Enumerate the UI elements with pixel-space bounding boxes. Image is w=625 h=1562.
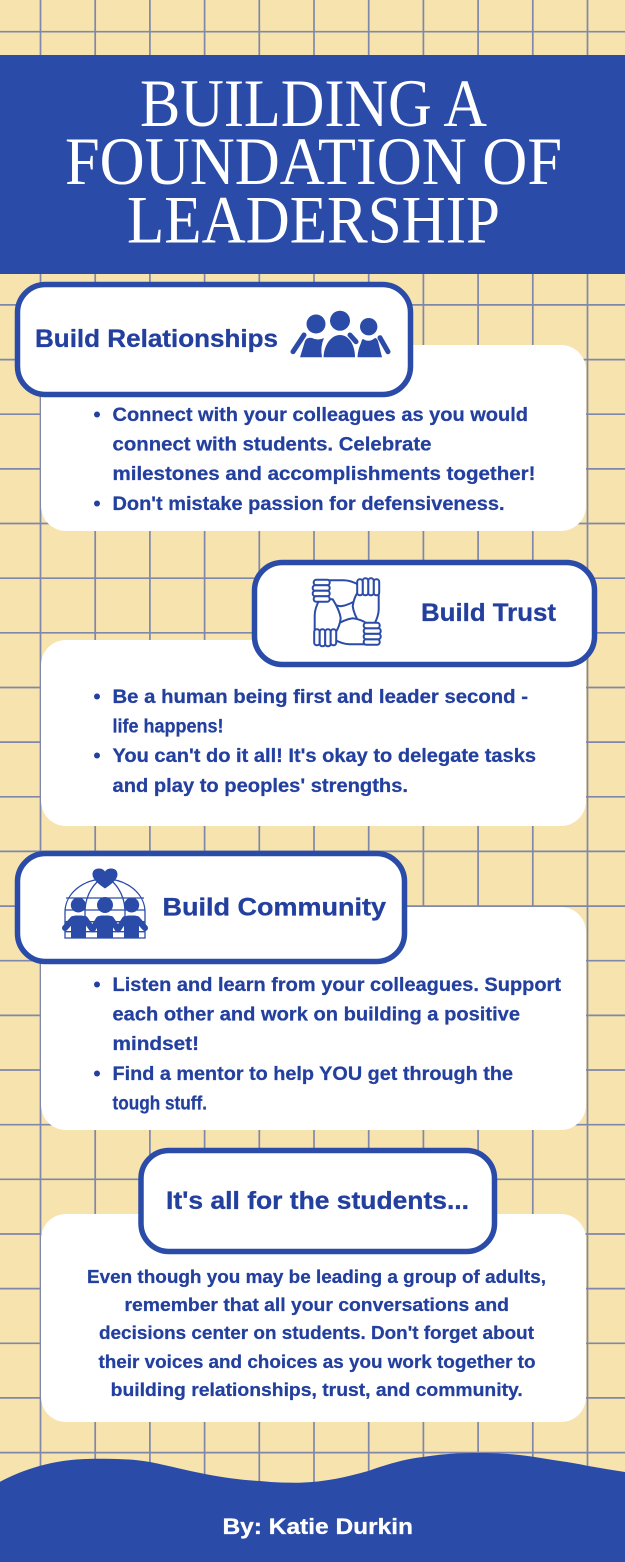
body text: trust bullets: and play to peoples' strengths. xyxy=(112,776,408,797)
body text: closing paragraph: decisions center on students. Don't forget about xyxy=(99,1323,534,1343)
heading pill: build community: Build Community xyxy=(162,894,386,922)
footer byline: By: Katie Durkin xyxy=(222,1514,413,1539)
icon: four linked hands xyxy=(313,578,381,646)
heading pill: it's all for the students xyxy=(141,1150,494,1252)
body text: community bullets xyxy=(94,975,562,1114)
heading pill: build trust xyxy=(254,562,594,664)
body text: trust bullets: life happens! xyxy=(112,716,224,738)
panel: build relationships xyxy=(18,284,586,531)
title: BUILDING A xyxy=(140,65,487,141)
body text: closing paragraph: building relationships, trust, and community. xyxy=(111,1380,523,1400)
body text: closing paragraph: Even though you may be leading a group of adults, xyxy=(87,1267,546,1287)
heading pill: build relationships: Build Relationships xyxy=(35,325,278,353)
body text: community bullets: Listen and learn from your colleagues. Support xyxy=(112,975,562,996)
body text: relationships bullets: milestones and accomplishments together! xyxy=(112,464,536,485)
title: LEADERSHIP xyxy=(127,182,500,258)
body text: relationships bullets: connect with students. Celebrate xyxy=(112,434,432,456)
body text: trust bullets: You can't do it all! It's okay to delegate tasks xyxy=(112,746,536,767)
body text: closing paragraph: their voices and choices as you work together to xyxy=(98,1352,536,1372)
body text: community bullets: Find a mentor to help YOU get through the xyxy=(112,1064,513,1085)
icon: group of people xyxy=(293,311,388,357)
title: FOUNDATION OF xyxy=(65,123,562,199)
title banner xyxy=(0,55,625,274)
body text: relationships bullets: Don't mistake passion for defensiveness. xyxy=(112,494,504,515)
heading pill: build relationships xyxy=(18,284,410,394)
icon: community dome with heart xyxy=(65,868,145,938)
body text: community bullets: each other and work on building a positive xyxy=(112,1004,520,1026)
panel: build community xyxy=(18,854,586,1130)
title xyxy=(65,65,562,258)
heading pill: build community xyxy=(18,854,404,962)
heading pill: build trust: Build Trust xyxy=(421,599,557,627)
body text: community bullets: tough stuff. xyxy=(112,1094,207,1114)
body text: closing paragraph xyxy=(87,1267,546,1400)
heading pill: it's all for the students: It's all for the students... xyxy=(166,1187,469,1215)
body text: relationships bullets: Connect with your colleagues as you would xyxy=(112,405,528,426)
body text: closing paragraph: remember that all your conversations and xyxy=(124,1295,509,1315)
panel: it's all for the students xyxy=(41,1150,586,1422)
body text: trust bullets: Be a human being first and leader second - xyxy=(112,687,528,708)
body text: relationships bullets xyxy=(94,405,536,515)
panel: build trust xyxy=(41,562,594,826)
body text: trust bullets xyxy=(94,687,536,797)
footer wave xyxy=(0,1453,625,1562)
body text: community bullets: mindset! xyxy=(112,1034,199,1055)
